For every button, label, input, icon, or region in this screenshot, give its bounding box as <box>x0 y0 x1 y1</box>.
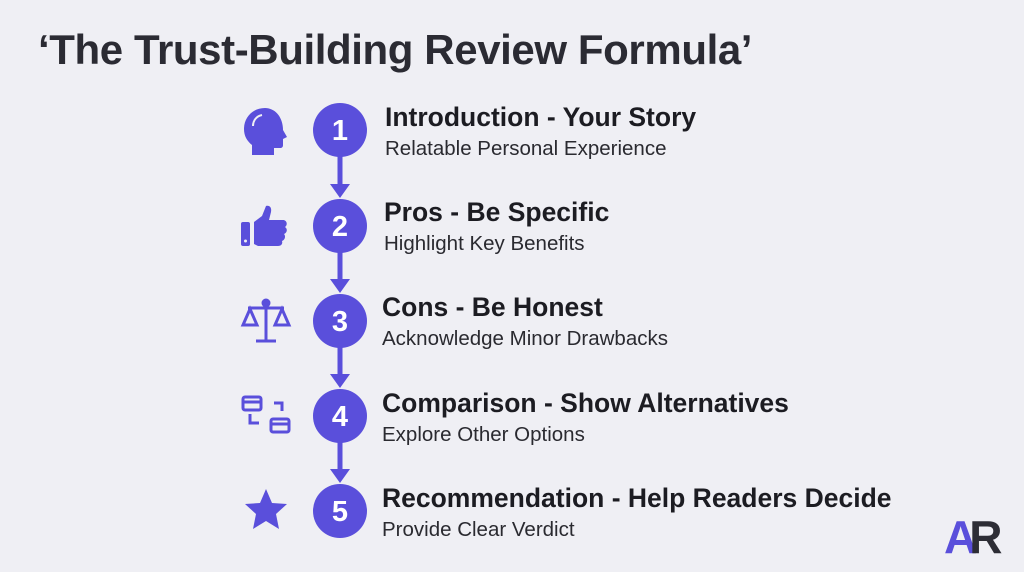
icon: comparison <box>243 397 289 432</box>
step circles <box>313 103 367 538</box>
step 2 text: Pros - Be Specific <box>384 197 609 227</box>
step 3 text <box>382 292 668 350</box>
step circles: 1 <box>332 115 348 147</box>
step 3 text: Cons - Be Honest <box>382 292 603 322</box>
step 4 text: Comparison - Show Alternatives <box>382 388 789 418</box>
step 1 text: Relatable Personal Experience <box>385 137 666 160</box>
icon: head <box>244 108 287 155</box>
step 4 text <box>382 388 789 446</box>
step 4 text: Explore Other Options <box>382 423 585 446</box>
connector arrows <box>330 150 350 483</box>
step circles: 5 <box>332 496 348 528</box>
step 1 text: Introduction - Your Story <box>385 102 696 132</box>
step circles: 4 <box>332 401 348 433</box>
icon: thumbs up <box>241 206 287 246</box>
step circles: 3 <box>332 306 348 338</box>
logo: AR <box>944 511 994 563</box>
step 3 text: Acknowledge Minor Drawbacks <box>382 327 668 350</box>
step circles: 2 <box>332 211 348 243</box>
step 1 text <box>385 102 696 160</box>
icon: star <box>245 489 287 529</box>
title: ‘The Trust-Building Review Formula’ <box>38 26 752 73</box>
icon: scales <box>243 300 289 341</box>
step 2 text: Highlight Key Benefits <box>384 232 585 255</box>
step 5 text <box>382 483 892 541</box>
step 2 text <box>384 197 609 255</box>
step 5 text: Recommendation - Help Readers Decide <box>382 483 892 513</box>
step 5 text: Provide Clear Verdict <box>382 518 575 541</box>
